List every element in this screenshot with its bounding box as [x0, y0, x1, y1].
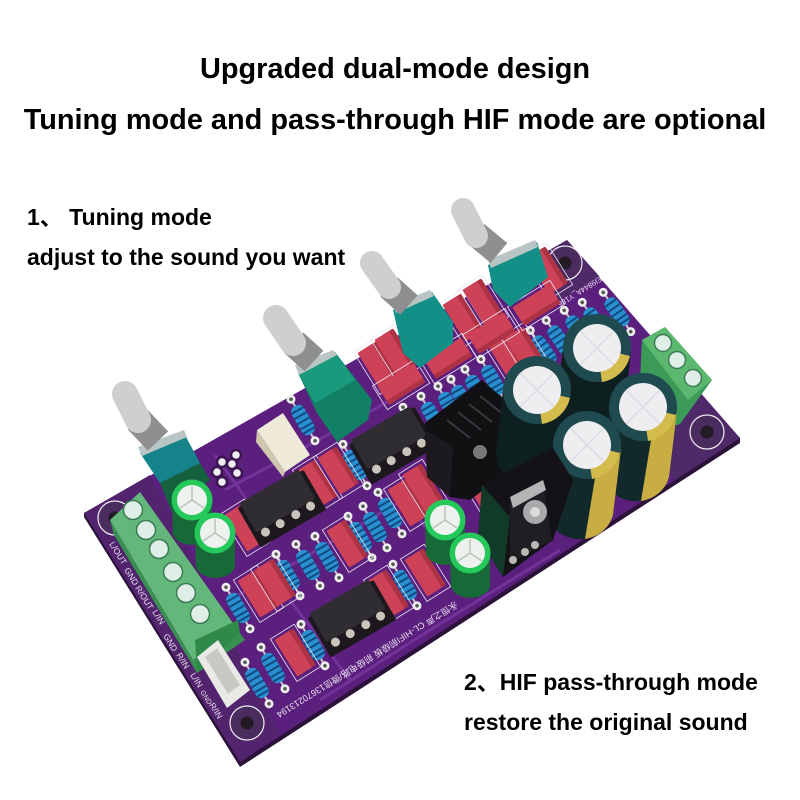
large electrolytic capacitor — [546, 411, 621, 539]
circuit board — [84, 210, 740, 767]
text block: tuning mode — [27, 204, 346, 270]
potentiometer 3 — [372, 263, 453, 368]
board surface — [84, 240, 740, 762]
board silkscreen text — [275, 274, 604, 720]
connector labels — [107, 540, 225, 720]
board edge — [84, 438, 740, 767]
text block: HIF pass-through mode: 2、HIF pass-through mode — [464, 669, 758, 695]
connector labels: R/OUT — [133, 584, 156, 611]
red film capacitors — [220, 242, 573, 681]
right screw terminal — [640, 327, 712, 430]
large electrolytic capacitor — [496, 356, 571, 484]
text block: HIF pass-through mode — [464, 669, 758, 735]
large electrolytic capacitor — [556, 314, 631, 442]
connector labels: GND — [198, 689, 212, 706]
large electrolytic capacitor — [602, 373, 677, 501]
connector labels: L/IN — [188, 671, 205, 689]
potentiometer 1 — [125, 394, 210, 513]
white connector — [197, 640, 250, 708]
heat sink 1 — [425, 380, 513, 500]
text block: tuning mode: adjust to the sound you want — [27, 244, 346, 270]
heat sink 2 with regulator — [478, 448, 573, 577]
circuit traces — [215, 395, 560, 700]
connector labels: GND — [161, 632, 180, 653]
board silkscreen text: EI9844A_Y186 — [556, 274, 604, 309]
title — [24, 53, 766, 136]
connector labels: GND — [122, 566, 141, 587]
relay — [256, 413, 310, 477]
potentiometer 2 — [276, 318, 372, 442]
resistors — [218, 285, 639, 711]
title: Upgraded dual-mode design — [200, 53, 590, 85]
mounting holes — [98, 246, 724, 740]
pin header — [212, 450, 242, 487]
title: Tuning mode and pass-through HIF mode are optional — [24, 104, 766, 136]
dark board margins — [84, 475, 280, 762]
potentiometer 4 — [463, 210, 548, 307]
connector labels: R/IN — [174, 651, 192, 670]
op-amp chips — [236, 404, 437, 658]
small green capacitors — [172, 480, 490, 598]
text block: tuning mode: 1、 Tuning mode — [27, 204, 212, 230]
left screw terminal — [110, 492, 245, 673]
connector labels: L/IN — [150, 608, 167, 626]
board silkscreen text: 永恒之声 CL-HIFI前级板 前级电路/微信13670213194 — [275, 599, 460, 720]
connector labels: L/OUT — [107, 540, 129, 566]
connector labels: R/IN — [207, 701, 225, 720]
text block: HIF pass-through mode: restore the original sound — [464, 709, 748, 735]
